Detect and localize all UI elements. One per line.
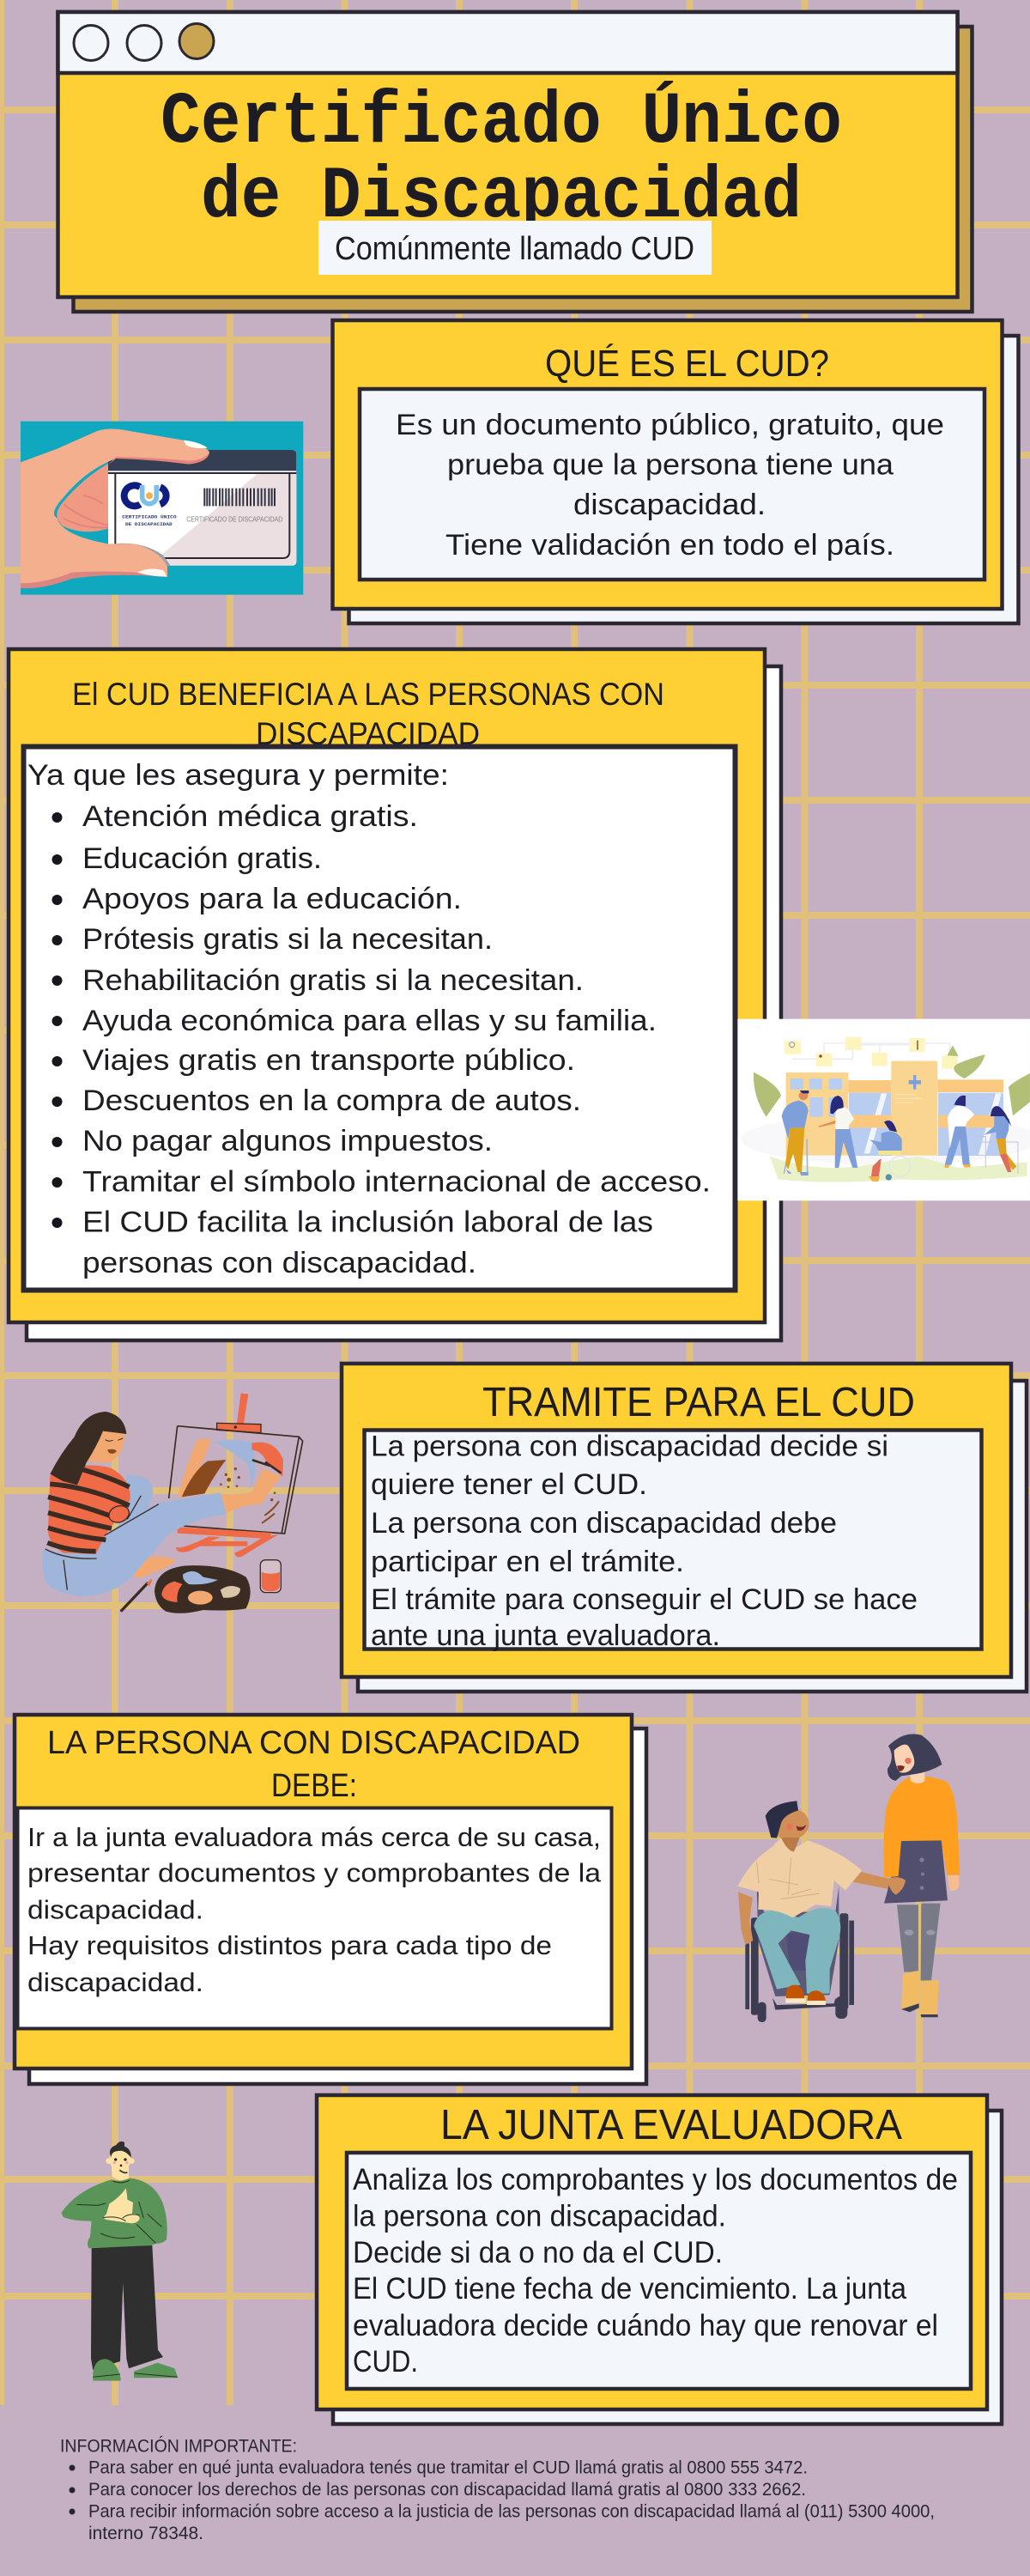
list box: Ayuda económica para ellas y su familia. — [82, 1005, 657, 1037]
text box: presentar documentos y comprobantes de la — [27, 1858, 602, 1887]
text box — [360, 389, 985, 580]
heading: QUÉ ES EL CUD? — [545, 343, 829, 385]
text box: discapacidad. — [27, 1967, 203, 1997]
list box: Tramitar el símbolo internacional de acceso. — [82, 1166, 711, 1199]
list box: No pagar algunos impuestos. — [82, 1125, 493, 1157]
text box: quiere tener el CUD. — [371, 1468, 647, 1501]
list box: Atención médica gratis. — [82, 800, 418, 833]
list: Para recibir información sobre acceso a la justicia de las personas con discapacidad llamá al (011) 5300 4000, — [88, 2502, 935, 2521]
title — [161, 81, 842, 239]
text box: CUD. — [353, 2345, 418, 2379]
text box: Hay requisitos distintos para cada tipo de — [27, 1930, 552, 1960]
panel: qué es el CUD — [333, 320, 1018, 623]
text box: ante una junta evaluadora. — [371, 1619, 720, 1652]
panel: la junta evaluadora — [317, 2095, 1002, 2424]
list box: Rehabilitación gratis si la necesitan. — [82, 964, 584, 997]
text box: Ir a la junta evaluadora más cerca de su casa, — [27, 1822, 601, 1852]
list box: Apoyos para la educación. — [82, 883, 462, 915]
text box: discapacidad. — [27, 1894, 203, 1925]
heading — [72, 677, 664, 751]
illustration: hand holding CUD card: CERTIFICADO DE DISCAPACIDAD — [186, 514, 282, 523]
woman — [883, 1734, 960, 2017]
text box — [347, 2153, 971, 2389]
text box — [17, 1808, 611, 2028]
list box: personas con discapacidad. — [82, 1247, 476, 1279]
text box: participar en el trámite. — [371, 1546, 684, 1578]
list box: Descuentos en la compra de autos. — [82, 1084, 581, 1117]
text box — [364, 1431, 982, 1652]
illustration: man signing with thumbs up — [62, 2142, 178, 2381]
text box: la persona con discapacidad. — [353, 2200, 726, 2233]
list: interno 78348. — [88, 2524, 203, 2543]
walking woman — [974, 1106, 1018, 1174]
text box: El CUD tiene fecha de vencimiento. La junta — [353, 2272, 906, 2306]
heading: LA PERSONA CON DISCAPACIDAD — [47, 1725, 580, 1761]
list box: Educación gratis. — [82, 842, 322, 875]
list box: Ya que les asegura y permite: — [27, 759, 449, 792]
man with crutches — [782, 1091, 809, 1176]
list box: El CUD facilita la inclusión laboral de las — [82, 1206, 653, 1238]
subtitle: Comúnmente llamado CUD — [335, 231, 694, 267]
list box: Viajes gratis en transporte público. — [82, 1044, 575, 1077]
man — [737, 1801, 906, 2005]
icon: window buttons — [74, 24, 214, 60]
heading — [47, 1725, 580, 1804]
text box: El trámite para conseguir el CUD se hace — [371, 1583, 918, 1616]
panel: header window — [58, 12, 972, 312]
illustration: woman painting with her foot — [42, 1394, 303, 1613]
list — [69, 2458, 935, 2543]
heading: TRAMITE PARA EL CUD — [482, 1380, 915, 1425]
woman in white — [818, 1096, 857, 1168]
illustration: hospital and people — [737, 1019, 1030, 1200]
text box: evaluadora decide cuándo hay que renovar el — [353, 2309, 938, 2342]
text box: Decide si da o no da el CUD. — [353, 2236, 723, 2269]
panel: beneficios del CUD — [9, 649, 781, 1340]
text box: La persona con discapacidad decide si — [371, 1431, 888, 1463]
title: Certificado Único — [161, 81, 842, 164]
illustration: hand holding CUD card: DE DISCAPACIDAD — [125, 522, 173, 527]
block: información importante — [60, 2437, 935, 2543]
heading: LA JUNTA EVALUADORA — [440, 2102, 902, 2148]
list: Para saber en qué junta evaluadora tenés que tramitar el CUD llamá gratis al 0800 555 3472. — [88, 2458, 808, 2478]
illustration: hand holding CUD card: CERTIFICADO ÚNICO — [122, 513, 178, 519]
text box: Analiza los comprobantes y los documentos de — [353, 2163, 958, 2196]
list box — [24, 747, 735, 1290]
doctor — [945, 1096, 974, 1168]
illustration: man in wheelchair holding hands with woman — [737, 1734, 960, 2022]
heading: DEBE: — [271, 1768, 357, 1804]
panel: la persona con discapacidad debe — [15, 1715, 646, 2084]
illustration: hand holding CUD card — [21, 422, 303, 595]
list: Para conocer los derechos de las personas con discapacidad llamá gratis al 0800 333 2662. — [88, 2480, 806, 2500]
subtitle — [318, 221, 712, 275]
wheelchair — [745, 1886, 854, 2022]
text box: Tiene validación en todo el país. — [445, 529, 894, 562]
text box: prueba que la persona tiene una — [447, 448, 894, 481]
text box: La persona con discapacidad debe — [371, 1507, 837, 1540]
panel: trámite para el CUD — [342, 1364, 1027, 1692]
text box: discapacidad. — [573, 489, 766, 521]
title: de Discapacidad — [201, 155, 802, 239]
heading: El CUD BENEFICIA A LAS PERSONAS CON — [72, 677, 664, 712]
text box: Es un documento público, gratuito, que — [396, 409, 944, 441]
seated woman in wheelchair — [869, 1121, 910, 1182]
heading: DISCAPACIDAD — [256, 716, 480, 751]
heading: INFORMACIÓN IMPORTANTE: — [60, 2437, 297, 2456]
list box: Prótesis gratis si la necesitan. — [82, 923, 493, 956]
